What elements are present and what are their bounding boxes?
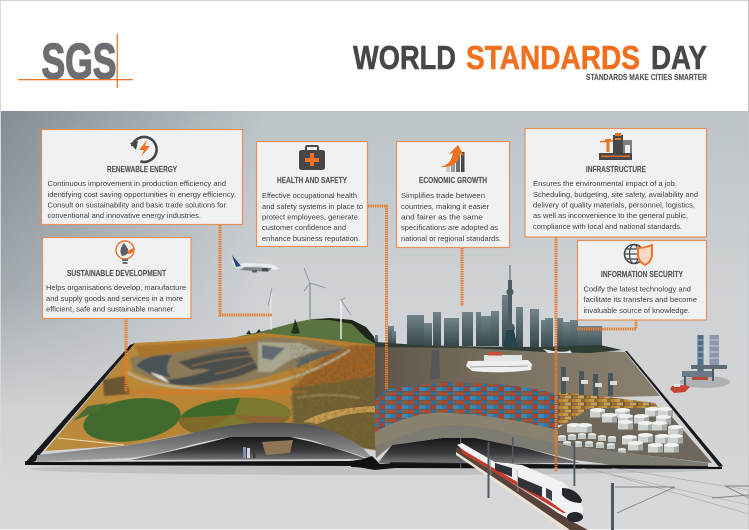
terrain base [45, 333, 376, 451]
railway catenary lines [582, 468, 749, 514]
quay strip [375, 413, 558, 446]
book: right page [375, 265, 723, 467]
panel: information security: invaluable source of knowledge. [584, 306, 690, 315]
panel: information security: facilitate its transfers and become [584, 295, 697, 304]
wind turbines [268, 268, 351, 339]
book base and page block [25, 423, 722, 470]
crane left [430, 350, 440, 380]
panel: health and safety: HEALTH AND SAFETY [277, 176, 347, 185]
panel: infrastructure: compliance with local and national standards. [533, 222, 682, 231]
panel: renewable energy: RENEWABLE ENERGY [107, 165, 177, 174]
panel: infrastructure: Ensures the environmental impact of a job. [533, 179, 677, 188]
upper right reddish terrain [292, 346, 376, 400]
panel: sustainable development: SUSTAINABLE DEVELOPMENT [67, 269, 166, 278]
title [353, 39, 707, 76]
connector: economic growth [460, 248, 464, 306]
panel: renewable energy: Consult on sustainability and basic trade solutions for [48, 200, 227, 210]
yard containers [558, 392, 668, 425]
panel: economic growth: countries, making it easier [401, 202, 490, 211]
book cover edge right [625, 351, 723, 467]
green circular fields [58, 392, 294, 448]
icon: growth arrow [440, 145, 464, 172]
trees [246, 319, 300, 334]
panel: sustainable development: and supply goods and services in a more [46, 294, 183, 303]
book shadow [30, 463, 720, 475]
panel: sustainable development [42, 238, 191, 318]
panel: sustainable development: efficient, safe and sustainable manner. [46, 304, 175, 314]
panel: renewable energy [42, 130, 242, 224]
book: left page [25, 318, 380, 463]
SGS logo: SGS [42, 34, 116, 90]
panel: economic growth: and fairer as the same [401, 212, 483, 222]
panel: infrastructure: Scheduling, budgeting, site safety, availability and [533, 190, 698, 199]
panel: information security: INFORMATION SECURITY [601, 270, 683, 279]
icon: light bulb with leaf [116, 241, 134, 264]
tank yard [558, 408, 712, 463]
panel: economic growth [396, 142, 510, 248]
panel: infrastructure: INFRASTRUCTURE [586, 165, 646, 174]
cruise ship [466, 352, 532, 372]
catenary poles [460, 437, 614, 530]
water [375, 343, 660, 402]
panel: infrastructure: as well as inconvenience to the general public, [533, 211, 688, 220]
Oriental Pearl tower [503, 265, 518, 348]
base black line [25, 458, 722, 470]
page block right [375, 425, 708, 467]
panel: renewable energy: Continuous improvement in production efficiency and [48, 179, 226, 188]
spine block [351, 456, 379, 468]
orange road strip [122, 389, 292, 395]
header band [0, 0, 749, 111]
panel: renewable energy: identifying cost saving opportunities in energy efficiency. [48, 190, 236, 199]
book cover edge left [25, 343, 135, 463]
under-arch shade right [378, 438, 580, 463]
olive scrub terrain [292, 376, 376, 450]
miners scene under arch [243, 440, 293, 458]
base shadow band right page [390, 462, 708, 468]
connector: health and safety [368, 206, 386, 389]
terrain texture [290, 345, 380, 450]
panel: information security: Codify the latest technology and [584, 284, 691, 294]
panel: infrastructure [525, 128, 706, 237]
panel: health and safety: Effective occupational health [262, 191, 357, 200]
high speed train [456, 443, 588, 530]
under-arch shade left [130, 437, 367, 460]
connector: sustainable to mine [126, 390, 308, 394]
far shore [375, 342, 622, 353]
panel: economic growth: ECONOMIC GROWTH [419, 176, 487, 185]
page block left [37, 423, 372, 462]
title: STANDARDS [466, 39, 640, 76]
title: DAY [651, 39, 707, 76]
panel: infrastructure: delivery of quality materials, personnel, logistics, [533, 200, 695, 210]
skyline [375, 295, 602, 349]
open-pit mine [127, 336, 350, 390]
gantry cranes [561, 367, 617, 396]
icon: globe and shield [624, 244, 652, 265]
icon: first-aid case [299, 146, 325, 170]
panel: economic growth: specifications are adopted as [401, 223, 498, 232]
panel: economic growth: Simplifies trade between [401, 191, 485, 200]
panel: health and safety: and safety systems in place to [262, 202, 363, 211]
icon: city and port [599, 133, 632, 160]
panel: health and safety [256, 142, 368, 246]
subtitle: STANDARDS MAKE CITIES SMARTER [586, 73, 707, 82]
panel: health and safety: protect employees, generate [262, 212, 358, 222]
connector: sustainable development [124, 318, 128, 392]
icon: renewable energy [130, 134, 159, 164]
oil rig [670, 335, 730, 393]
container terminal [375, 382, 558, 445]
dark terrain patches [103, 376, 130, 396]
storage tanks [558, 407, 683, 454]
title: WORLD [353, 39, 456, 76]
panel: information security [578, 240, 706, 320]
foreground catenary pole [488, 442, 490, 498]
connector: information security [577, 320, 636, 329]
hill [236, 318, 376, 346]
panel: health and safety: customer confidence and [262, 223, 346, 232]
panel: health and safety: enhance business reputation. [262, 234, 360, 243]
airplane [231, 255, 279, 272]
white stadium [543, 349, 572, 353]
hill dark crest [312, 318, 376, 344]
connector: renewable energy [220, 225, 272, 315]
panel: economic growth: national or regional standards. [401, 234, 501, 243]
panel: renewable energy: conventional and innovative energy industries. [48, 211, 201, 220]
panel: sustainable development: Helps organisations develop, manufacture [46, 283, 186, 292]
connector: infrastructure [554, 237, 558, 472]
